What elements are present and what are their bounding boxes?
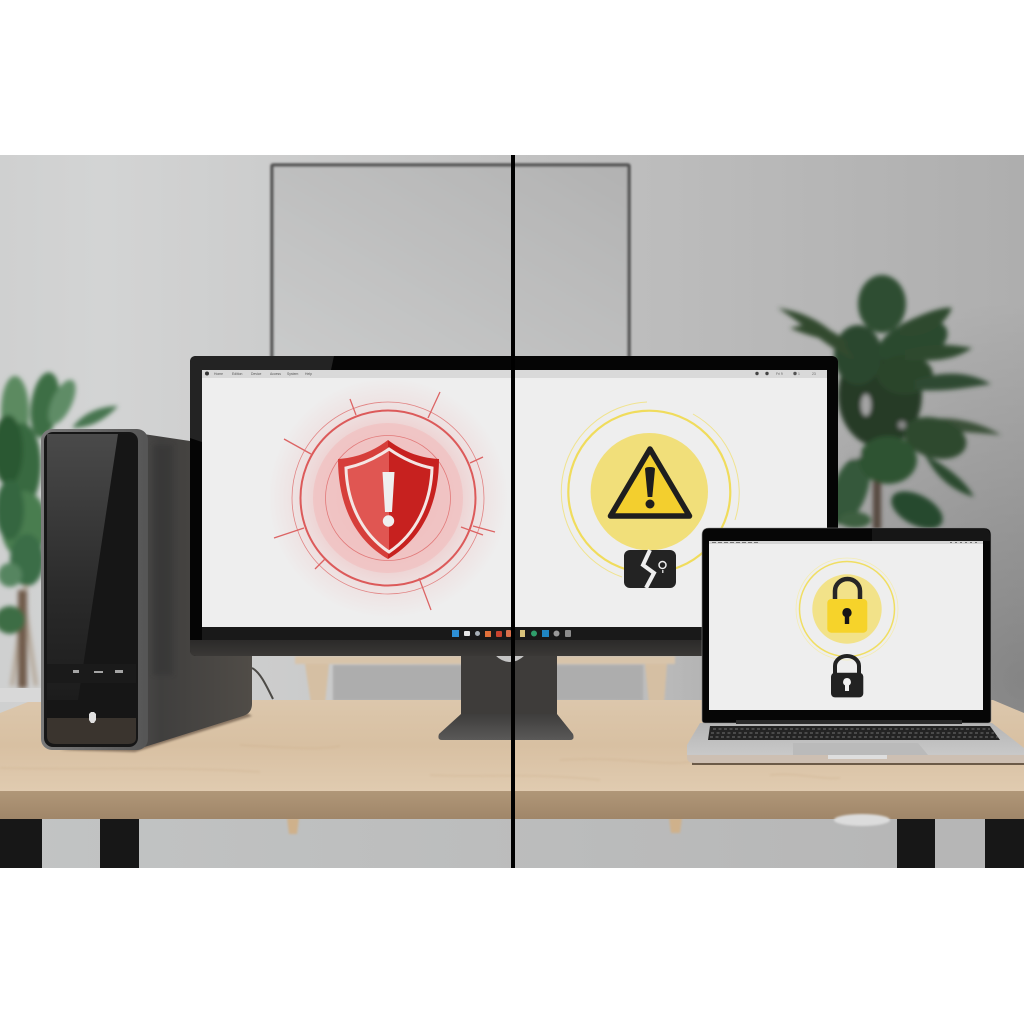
laptop lid glare xyxy=(872,529,990,541)
yellow ring xyxy=(568,411,730,573)
laptop xyxy=(687,528,1024,765)
tower front bezel xyxy=(41,429,148,750)
monitor bezel xyxy=(190,356,838,656)
laptop hinge xyxy=(736,720,962,724)
stand base xyxy=(438,714,574,740)
monitor xyxy=(190,356,838,656)
table legs xyxy=(0,819,1024,868)
tower port labels xyxy=(73,670,123,673)
laptop front edge xyxy=(687,755,1024,763)
monitor stand xyxy=(438,654,574,740)
infographic scene xyxy=(0,155,1024,868)
yellow warning graphic xyxy=(561,402,739,588)
laptop menu bar xyxy=(709,541,983,544)
laptop deck xyxy=(687,723,1024,757)
menu bar xyxy=(202,370,827,378)
wall shading xyxy=(838,378,1024,713)
tower front glass xyxy=(44,432,138,747)
laptop shadow xyxy=(692,761,1024,765)
menu bar: Home xyxy=(214,372,223,376)
alert rays xyxy=(274,392,495,610)
keyboard xyxy=(708,726,1000,740)
desktop tower xyxy=(41,429,252,752)
touchpad xyxy=(793,743,928,755)
wall picture frame xyxy=(272,165,629,375)
table top xyxy=(0,700,1024,791)
wall background xyxy=(0,155,1024,715)
pot behind tower xyxy=(0,688,42,702)
menu bar: Edition xyxy=(232,372,242,376)
tower glass reflection xyxy=(47,434,118,700)
yellow lock keyhole xyxy=(842,608,852,624)
table front edge xyxy=(0,791,1024,819)
red alert graphic xyxy=(274,392,496,610)
laptop notch xyxy=(828,755,887,759)
laptop screen xyxy=(709,541,983,710)
menu bar: Access xyxy=(270,372,281,376)
laptop lid xyxy=(702,528,991,723)
tower cable xyxy=(252,668,273,699)
broken icon tile xyxy=(624,550,676,588)
warning triangle xyxy=(610,449,690,516)
monitor screen xyxy=(202,370,827,627)
tower lower panel xyxy=(47,718,136,744)
rings xyxy=(292,402,484,594)
lock ring xyxy=(800,562,894,656)
lock thin ring xyxy=(796,558,898,660)
menu bar: 1 xyxy=(798,372,800,376)
tower shadow xyxy=(60,712,252,752)
tower power logo xyxy=(89,712,96,723)
photo scene xyxy=(0,155,1024,868)
center divider line xyxy=(511,155,515,868)
yellow lock shackle xyxy=(835,579,860,600)
menu bar: 23 xyxy=(812,372,816,376)
bezel glare xyxy=(190,356,334,442)
taskbar xyxy=(202,627,702,640)
tower side panel xyxy=(144,434,252,747)
menu bar: Fri 9 xyxy=(776,372,783,376)
pale disk xyxy=(313,423,463,573)
yellow disk xyxy=(591,433,708,550)
warning exclamation xyxy=(645,467,655,497)
red shield xyxy=(338,440,439,559)
pot under bench xyxy=(834,814,890,826)
floor xyxy=(42,819,985,868)
right plant xyxy=(778,275,1001,536)
tower shaded side stripe xyxy=(153,445,173,675)
wood grain xyxy=(0,745,840,780)
exclamation mark xyxy=(382,472,394,512)
background bench xyxy=(287,656,682,834)
black lock icon xyxy=(831,656,863,697)
thin arcs xyxy=(561,402,739,577)
menu bar: Device xyxy=(251,372,261,376)
left plant xyxy=(0,370,118,688)
stand neck xyxy=(461,654,557,716)
yellow lock graphic xyxy=(796,558,898,660)
yellow lock body xyxy=(827,599,867,633)
red glow xyxy=(286,396,490,600)
monitor chin xyxy=(190,640,702,656)
lock disk xyxy=(812,574,882,644)
menu bar: Help xyxy=(305,372,312,376)
menu bar: System xyxy=(287,372,298,376)
stand hinge xyxy=(496,656,524,662)
